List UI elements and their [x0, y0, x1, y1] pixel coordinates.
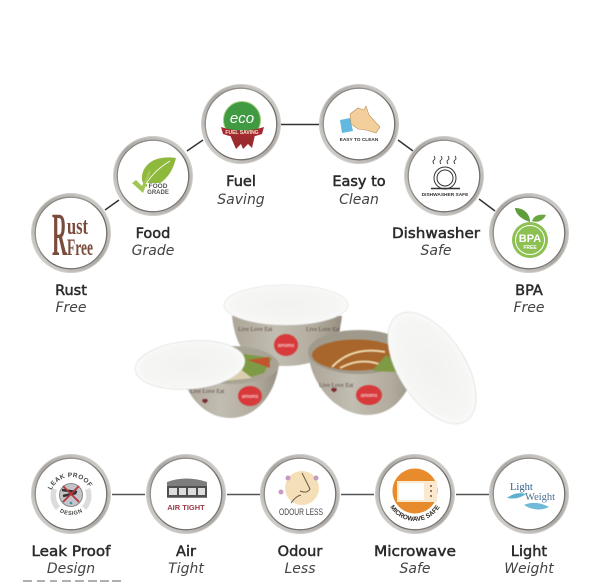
badge: light weight: [490, 454, 568, 534]
label: dishwasher safe: [392, 226, 480, 259]
back bowl: Live Love Eat: [238, 327, 273, 333]
icon: eco seal: FUEL SAVING: [225, 130, 259, 136]
connector lines: [105, 124, 495, 494]
left bowl: amoms: [242, 394, 259, 400]
label: odour less: Less: [284, 561, 316, 577]
label: food grade: [132, 226, 174, 259]
back bowl: Live Love Eat: [306, 327, 341, 333]
icon: leak proof seal: LEAK PROOF: [48, 472, 92, 490]
icon: bpa leaf: FREE: [523, 245, 537, 251]
right bowl: [308, 297, 494, 439]
label: rust free: Free: [55, 300, 87, 316]
icon: feathers with text: Light: [510, 482, 533, 493]
label: leak proof design: Design: [47, 561, 95, 577]
label: fuel saving: Saving: [217, 192, 265, 208]
label: air tight: Tight: [168, 561, 204, 577]
label: leak proof design: Leak Proof: [32, 544, 111, 560]
icon: bpa leaf: BPA: [519, 233, 541, 245]
badge: easy to clean: [320, 84, 398, 164]
icon: eco seal: [221, 102, 264, 149]
icon: rust free: R: [52, 202, 67, 269]
label: easy to clean: Clean: [339, 192, 379, 208]
icon: microwave: MICROWAVE SAFE: [390, 504, 440, 521]
right bowl: Live Love Eat: [319, 383, 354, 389]
badge: rust free: [32, 194, 110, 272]
left bowl: [133, 336, 279, 418]
label: light weight: Light: [511, 544, 547, 560]
label: leak proof design: [32, 544, 111, 577]
label: dishwasher safe: Dishwasher: [392, 226, 480, 242]
label: food grade: Food: [136, 226, 170, 242]
label: microwave safe: Microwave: [374, 544, 456, 560]
back bowl: [224, 285, 348, 366]
label: rust free: Rust: [55, 283, 87, 299]
icon: feathers with text: Weight: [525, 492, 555, 503]
label: air tight: [168, 544, 204, 577]
label: air tight: Air: [176, 544, 196, 560]
icon: rust free: Free: [67, 235, 93, 260]
label: food grade: Grade: [132, 243, 174, 259]
label: microwave safe: Safe: [399, 561, 431, 577]
label: fuel saving: [217, 174, 265, 208]
label: bpa free: Free: [513, 300, 545, 316]
label: bpa free: BPA: [515, 283, 543, 299]
label: fuel saving: Fuel: [226, 174, 256, 190]
badge: food grade: [114, 136, 192, 216]
icon: rust free: ust: [67, 214, 88, 240]
label: microwave safe: [374, 544, 456, 577]
label: light weight: Weight: [504, 561, 554, 577]
badge: leak proof: [31, 454, 111, 534]
icon: dish with steam: DISHWASHER SAFE: [422, 192, 469, 198]
badge: dishwasher safe: [404, 136, 484, 216]
product photo: three bowls: [133, 285, 494, 439]
label: rust free: [55, 283, 87, 316]
icon: eco seal: eco: [230, 110, 254, 127]
label: odour less: [278, 544, 322, 577]
label: bpa free: [513, 283, 545, 316]
icon: bpa leaf: [512, 208, 548, 258]
label: easy to clean: Easy to: [332, 174, 386, 190]
badge: odour less: [260, 454, 340, 534]
badge: bpa free: [490, 194, 568, 272]
label: odour less: Odour: [278, 544, 322, 560]
left bowl: Live Love Eat: [190, 389, 225, 395]
badge: air tight: [146, 454, 226, 534]
icon: washing hand: EASY TO CLEAN: [340, 137, 379, 143]
label: light weight: [504, 544, 554, 577]
icon: feathers with text: [507, 482, 555, 510]
icon: green leaf check: FOOD: [149, 183, 168, 190]
right bowl: amoms: [361, 393, 378, 399]
badge: fuel saving: [202, 84, 280, 164]
badge: microwave safe: [375, 454, 455, 534]
icon: nose with flowers: ODOUR LESS: [279, 507, 323, 518]
icon: air tight tray: AIR TIGHT: [167, 503, 205, 512]
icon: green leaf check: GRADE: [147, 190, 169, 196]
label: dishwasher safe: Safe: [420, 243, 452, 259]
cropped text fragments at bottom edge: [23, 580, 121, 582]
label: easy to clean: [332, 174, 386, 208]
icon: green leaf check: [132, 157, 176, 196]
back bowl: amoms: [278, 343, 295, 349]
icon: leak proof seal: [48, 472, 92, 515]
icon: leak proof seal: DESIGN: [60, 508, 82, 515]
